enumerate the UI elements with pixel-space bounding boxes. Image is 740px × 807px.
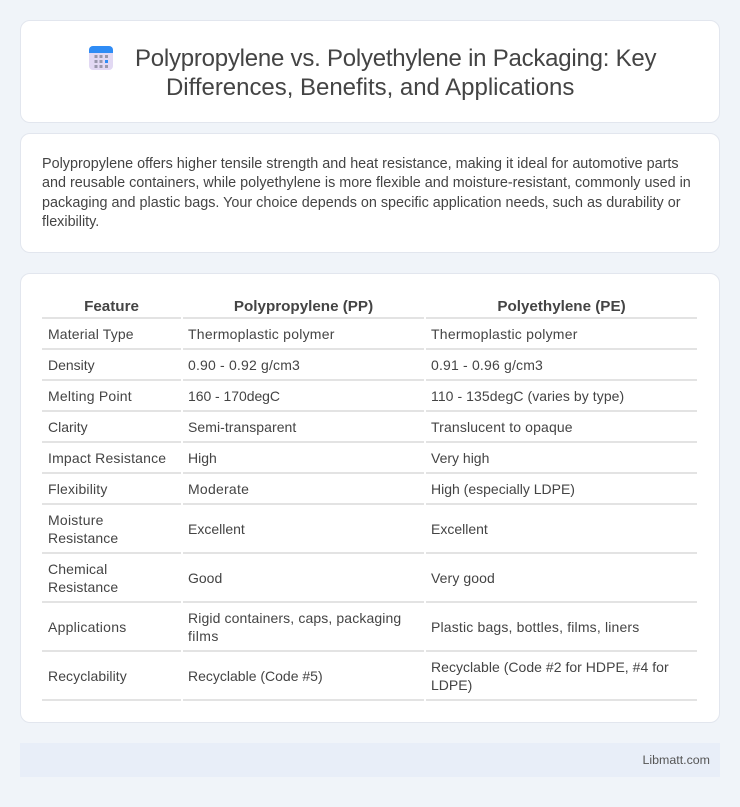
header panel bbox=[20, 20, 720, 123]
row: applications: films bbox=[188, 628, 219, 644]
intro paragraph bbox=[42, 156, 691, 230]
row: recyclability: LDPE) bbox=[431, 677, 472, 693]
table header row bbox=[84, 298, 626, 315]
row: moisture resistance: Excellent bbox=[188, 521, 245, 537]
row: recyclability: Recyclable (Code #2 for HDPE, #4 for bbox=[431, 659, 669, 675]
row: density: Density bbox=[48, 357, 95, 373]
row: clarity: Semi-transparent bbox=[188, 419, 296, 435]
row: applications: Rigid containers, caps, packaging bbox=[188, 610, 401, 626]
row: material type: Material Type bbox=[48, 326, 134, 342]
row: recyclability: Recyclability bbox=[48, 668, 127, 684]
row: applications: Applications bbox=[48, 619, 126, 635]
row: impact resistance bbox=[48, 450, 489, 466]
intro paragraph: and reusable containers, while polyethylene is more flexible and moisture-resistant, commonly used in bbox=[42, 175, 691, 191]
row: chemical resistance: Resistance bbox=[48, 579, 118, 595]
comparison table panel bbox=[20, 273, 720, 723]
row: melting point bbox=[48, 388, 624, 404]
row: melting point: 160 - 170degC bbox=[188, 388, 280, 404]
icon: calendar bbox=[89, 46, 113, 70]
row: chemical resistance: Very good bbox=[431, 570, 495, 586]
table header row: Polypropylene (PP) bbox=[234, 298, 373, 315]
row: applications bbox=[48, 610, 639, 644]
footer credit: Libmatt.com bbox=[643, 753, 710, 767]
row: material type: Thermoplastic polymer bbox=[431, 326, 578, 342]
row: impact resistance: Impact Resistance bbox=[48, 450, 166, 466]
row: material type bbox=[48, 326, 578, 342]
row: clarity: Translucent to opaque bbox=[431, 419, 573, 435]
table header row: Polyethylene (PE) bbox=[497, 298, 626, 315]
row: clarity: Clarity bbox=[48, 419, 88, 435]
row: clarity bbox=[48, 419, 573, 435]
row: recyclability: Recyclable (Code #5) bbox=[188, 668, 323, 684]
row: flexibility: Moderate bbox=[188, 481, 249, 497]
row: moisture resistance: Excellent bbox=[431, 521, 488, 537]
title: Polypropylene vs. Polyethylene in Packaging: Key bbox=[135, 45, 656, 72]
table header row: Feature bbox=[84, 298, 139, 315]
row: melting point: Melting Point bbox=[48, 388, 132, 404]
row: density: 0.91 - 0.96 g/cm3 bbox=[431, 357, 543, 373]
footer bar bbox=[20, 743, 720, 777]
row: impact resistance: Very high bbox=[431, 450, 489, 466]
title: Differences, Benefits, and Applications bbox=[166, 74, 574, 101]
row: chemical resistance: Chemical bbox=[48, 561, 107, 577]
intro paragraph: packaging and plastic bags. Your choice depends on specific application needs, such as durability or bbox=[42, 194, 681, 210]
row: chemical resistance: Good bbox=[188, 570, 222, 586]
title bbox=[135, 45, 656, 101]
row: moisture resistance: Moisture bbox=[48, 512, 104, 528]
row: moisture resistance bbox=[48, 512, 488, 546]
row: density bbox=[48, 357, 543, 373]
intro paragraph: Polypropylene offers higher tensile strength and heat resistance, making it ideal for automotive parts bbox=[42, 156, 679, 172]
row: flexibility: High (especially LDPE) bbox=[431, 481, 575, 497]
row: recyclability bbox=[48, 659, 669, 693]
row: impact resistance: High bbox=[188, 450, 217, 466]
row: density: 0.90 - 0.92 g/cm3 bbox=[188, 357, 300, 373]
row: moisture resistance: Resistance bbox=[48, 530, 118, 546]
row: material type: Thermoplastic polymer bbox=[188, 326, 335, 342]
row: flexibility bbox=[48, 481, 575, 497]
intro text panel bbox=[20, 133, 720, 253]
row: melting point: 110 - 135degC (varies by type) bbox=[431, 388, 624, 404]
intro paragraph: flexibility. bbox=[42, 214, 99, 230]
row: flexibility: Flexibility bbox=[48, 481, 108, 497]
row: chemical resistance bbox=[48, 561, 495, 595]
row: applications: Plastic bags, bottles, films, liners bbox=[431, 619, 639, 635]
